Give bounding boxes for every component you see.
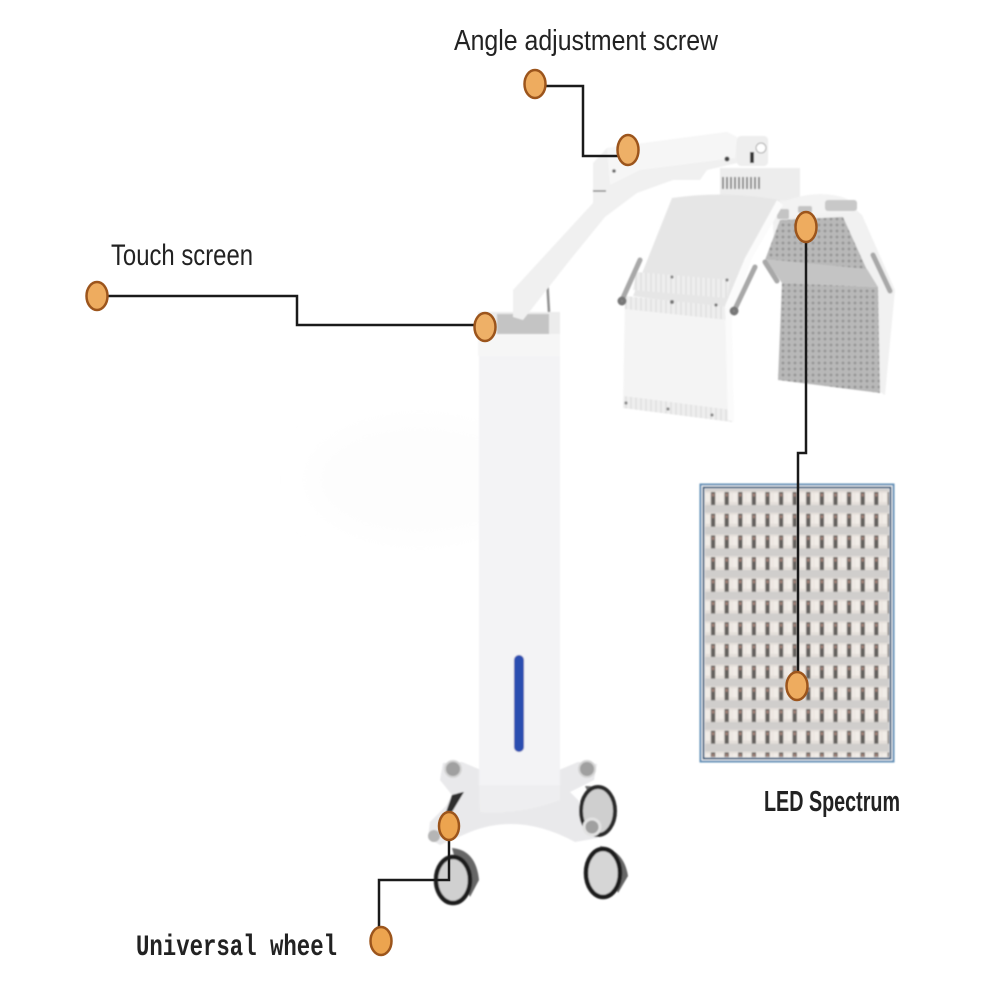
wheel: front left <box>436 848 479 903</box>
blue indicator bar <box>514 655 524 752</box>
callout: touch screen <box>86 239 496 341</box>
wheel: front right <box>586 846 628 897</box>
left LED panel <box>623 194 783 422</box>
faint background shadow <box>310 420 530 540</box>
LED spectrum close-up <box>700 484 894 762</box>
wheel: rear right <box>581 786 616 835</box>
label: angle adjustment screw: Angle adjustment screw <box>454 25 719 57</box>
marker: on column head <box>474 313 496 341</box>
marker: on arm <box>618 135 638 165</box>
label: LED spectrum: LED Spectrum <box>764 786 900 818</box>
device: light therapy machine <box>428 132 895 903</box>
arm joint <box>737 136 768 166</box>
callout: angle adjustment screw <box>454 25 719 165</box>
column <box>478 312 560 812</box>
vent box <box>720 168 800 202</box>
wheel base <box>428 761 598 845</box>
leader line <box>379 838 449 931</box>
callout: universal wheel <box>136 812 459 965</box>
right LED panel <box>765 194 895 395</box>
leader line <box>107 296 475 325</box>
LED grid <box>705 489 889 757</box>
leader line <box>798 240 806 676</box>
marker: outer <box>370 927 392 955</box>
label: universal wheel: Universal wheel <box>136 931 337 965</box>
label: touch screen: Touch screen <box>111 239 253 272</box>
marker: on panel <box>796 212 816 242</box>
column head / touch screen <box>478 312 560 356</box>
callout: LED spectrum <box>764 212 900 818</box>
support arm <box>513 132 768 320</box>
marker: outer <box>524 70 546 98</box>
marker: on LED grid <box>786 672 808 700</box>
marker: outer <box>86 282 108 310</box>
panel hinge brackets <box>620 255 890 313</box>
leader line <box>546 86 618 156</box>
marker: on base <box>439 812 459 840</box>
